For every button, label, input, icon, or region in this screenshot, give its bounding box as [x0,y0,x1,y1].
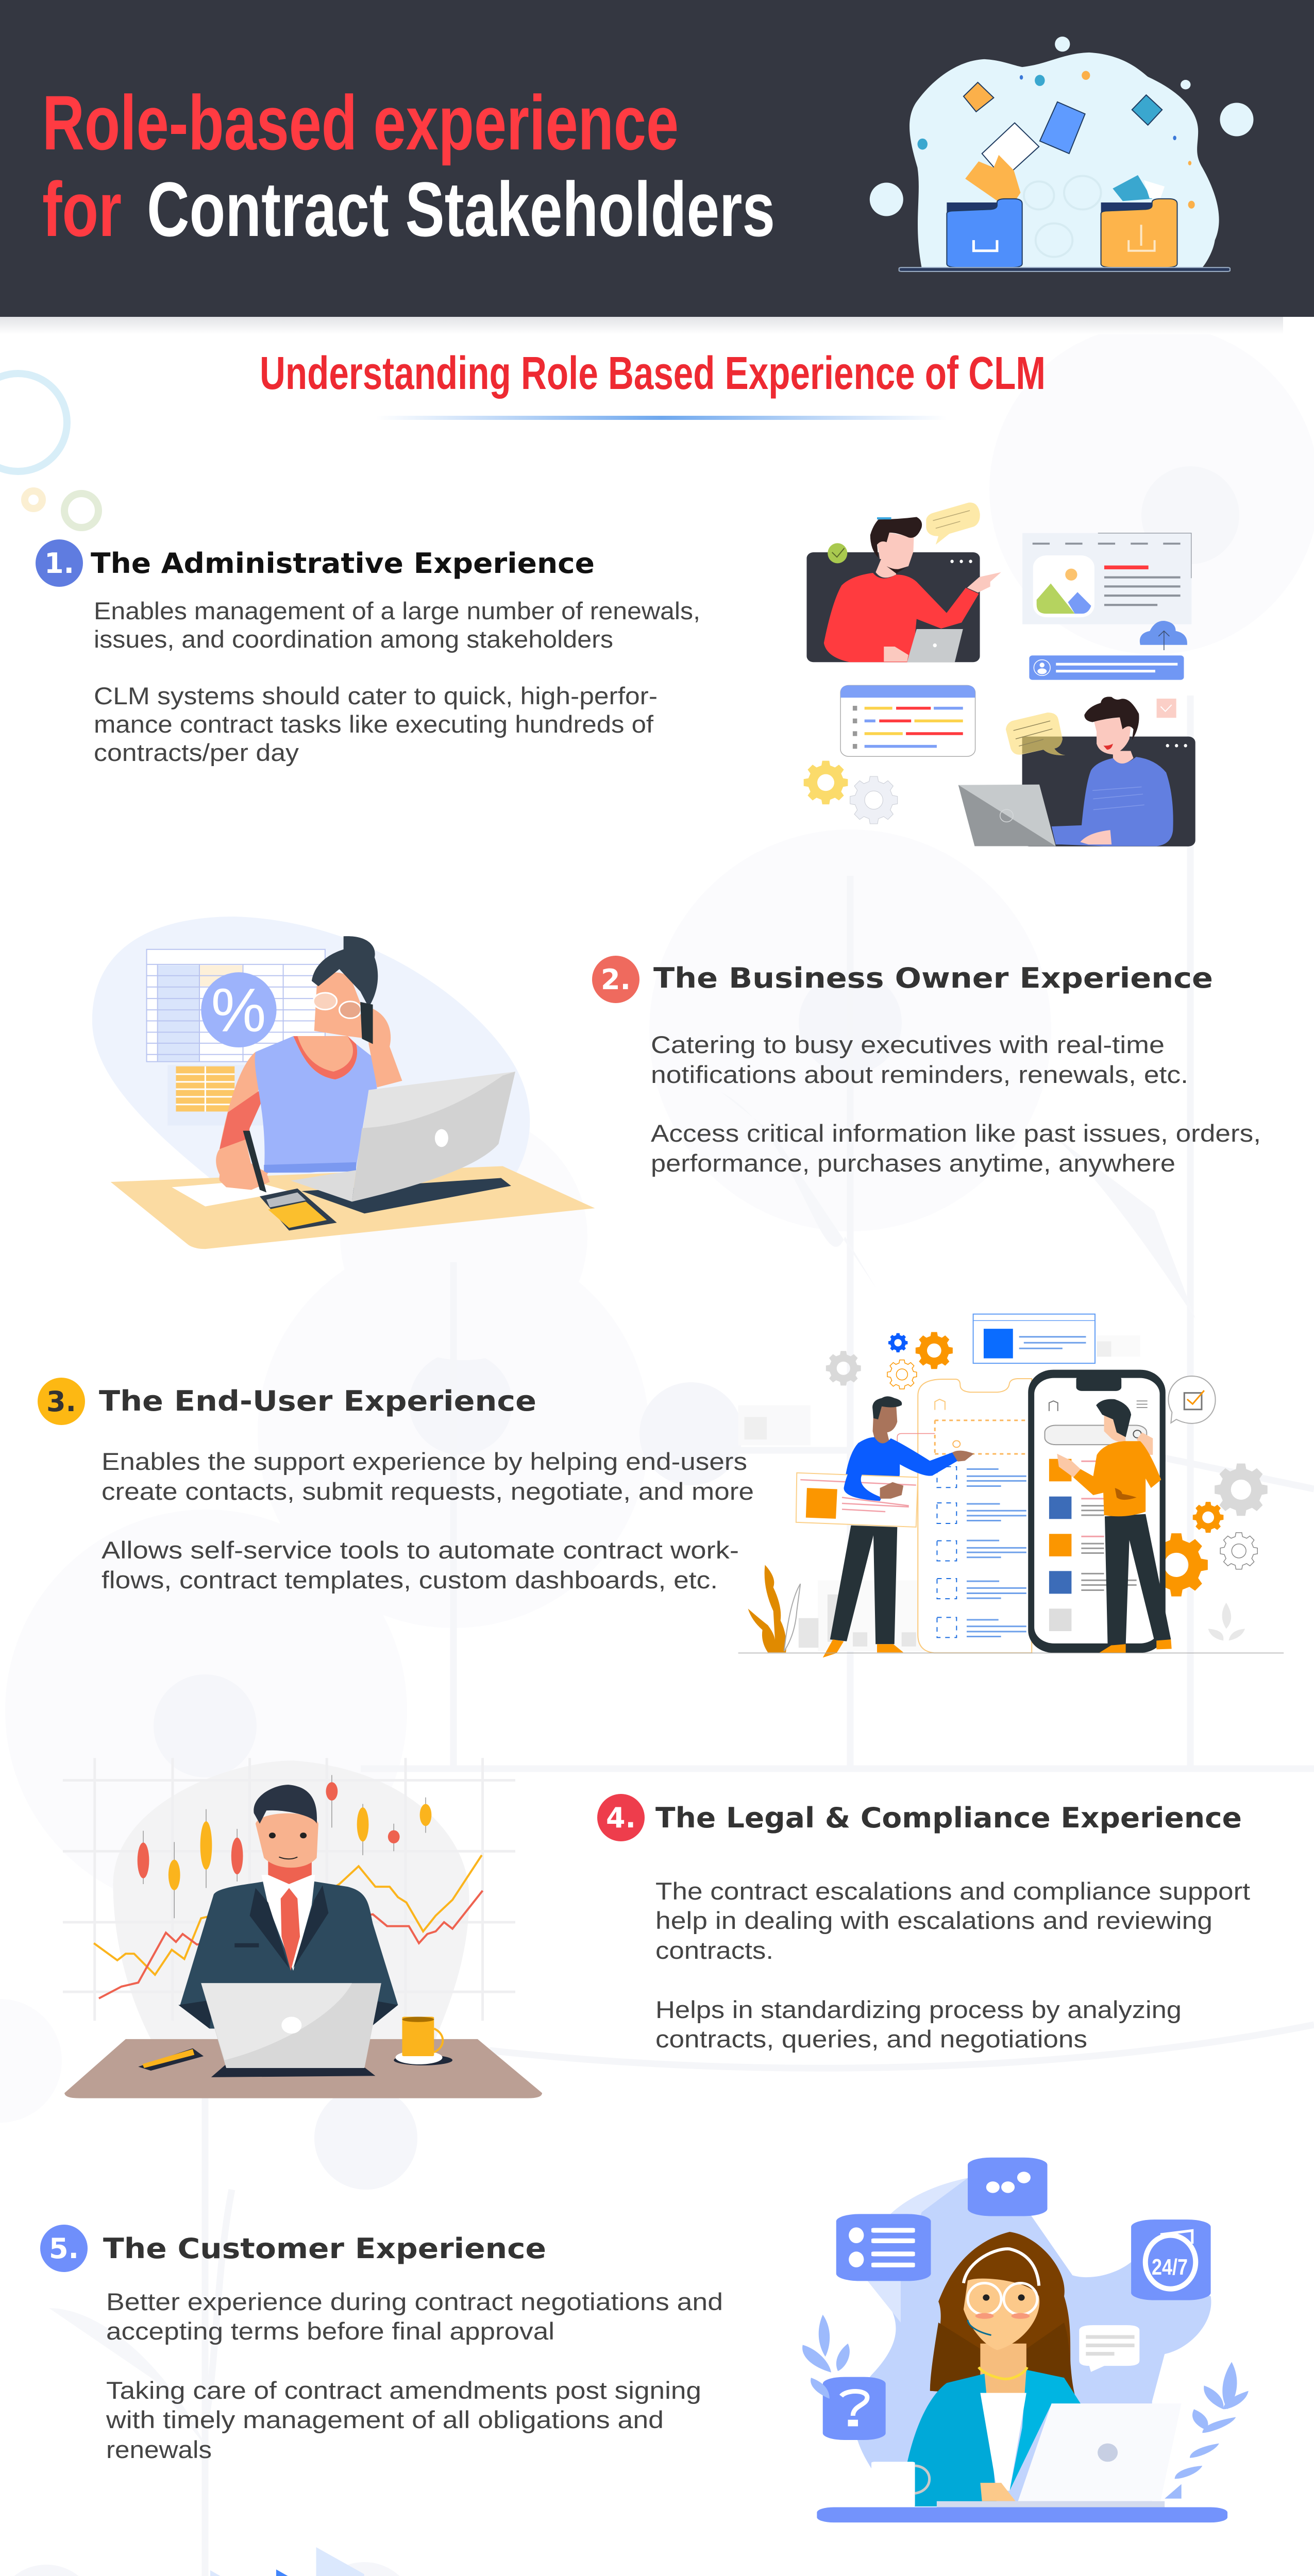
body text 2: Access critical information like past issues, orders, [651,1120,1261,1147]
body text 5: Better experience during contract negotiations and [106,2288,723,2315]
header banner [0,0,1314,334]
illustration: isometric documents and people [95,2547,500,2576]
section heading: Understanding Role Based Experience of CLM [260,348,1046,399]
heading 1: The Administrative Experience [91,547,595,580]
body text 4: contracts, queries, and negotiations [655,2025,1087,2053]
body text 2 [651,1031,1261,1177]
body text 4: contracts. [655,1937,773,1964]
body text 2: Catering to busy executives with real-time [651,1031,1165,1058]
body text 4: The contract escalations and compliance support [655,1877,1250,1905]
body text 3 [102,1448,754,1594]
number badge 2: 2. [601,963,631,996]
number badge 3: 3. [46,1385,76,1418]
illustration: admins at screens [804,502,1195,846]
body text 1: issues, and coordination among stakeholders [94,625,613,653]
heading 5: The Customer Experience [103,2232,546,2265]
panel: supplier experience [95,2547,1273,2576]
title line 2: for [42,166,122,252]
number badge 2 [592,956,639,1003]
number badge 1: 1. [44,547,74,580]
body text 5: Taking care of contract amendments post signing [106,2377,701,2404]
body text 2: notifications about reminders, renewals, etc. [651,1061,1188,1088]
body text 4: Helps in standardizing process by analyzing [655,1996,1182,2023]
panel: end-user experience [38,1314,1284,1657]
illustration: support agent [802,2158,1249,2522]
heading 4: The Legal & Compliance Experience [655,1802,1242,1834]
number badge 1 [36,539,83,587]
heading 3: The End-User Experience [99,1385,536,1417]
body text 5: renewals [106,2436,212,2463]
body text 4: help in dealing with escalations and reviewing [655,1907,1212,1934]
body text 3: flows, contract templates, custom dashboards, etc. [102,1566,718,1594]
title line 1: Role-based experience [42,79,679,166]
body text 1: CLM systems should cater to quick, high-perfor- [94,682,658,709]
body text 2: performance, purchases anytime, anywhere [651,1149,1175,1177]
panel: legal and compliance experience [63,1758,1250,2098]
body text 5: accepting terms before final approval [106,2317,554,2345]
panel: customer experience [40,2158,1249,2522]
number badge 4: 4. [606,1802,636,1834]
illustration: phone app and users [738,1314,1284,1657]
number badge 4 [597,1794,645,1841]
body text 5: with timely management of all obligations and [106,2406,664,2433]
heading 2: The Business Owner Experience [653,962,1213,994]
body text 1: Enables management of a large number of renewals, [94,597,700,624]
body text 3: Allows self-service tools to automate contract work- [102,1536,739,1564]
body text 1: contracts/per day [94,739,299,766]
body text 4 [655,1877,1250,2053]
body text 1: mance contract tasks like executing hundreds of [94,710,654,738]
body text 5 [106,2288,723,2463]
icon: folders illustration [870,37,1253,272]
icon: 24/7 label: 24/7 [1152,2255,1188,2280]
body text 3: Enables the support experience by helping end-users [102,1448,747,1475]
body text 1 [94,597,700,766]
panel: administrative experience [36,502,1195,846]
illustration: woman with laptop [92,917,595,1249]
body text 3: create contacts, submit requests, negotiate, and more [102,1478,754,1505]
title line 2: Contract Stakeholders [147,166,775,252]
number badge 5: 5. [49,2232,79,2265]
panel: business owner experience [92,917,1261,1249]
title line 2 [42,166,775,252]
icon: percent symbol: % [211,976,266,1045]
number badge 5 [40,2225,88,2272]
illustration: businessman with charts [63,1758,542,2098]
number badge 3 [38,1378,85,1425]
